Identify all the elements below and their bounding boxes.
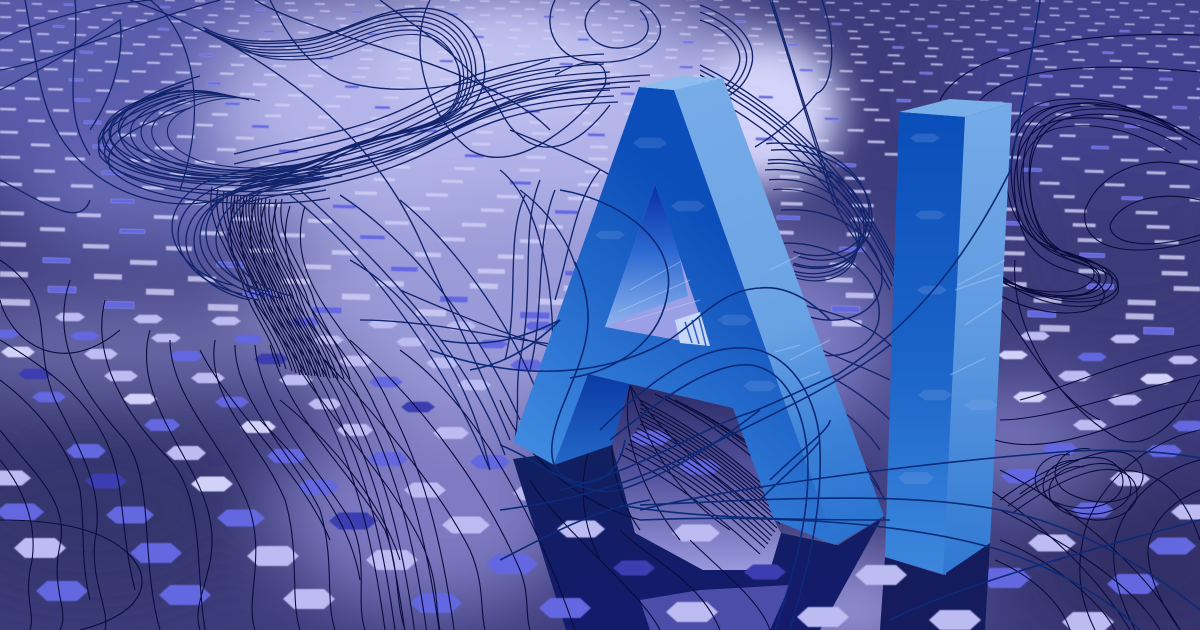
A inner wall [554,374,630,465]
A side face [674,78,884,545]
near hexagon tiles [0,313,1200,630]
letter A [513,76,884,545]
flowing lines in front of the letters [430,0,1200,630]
I side face [943,103,1012,575]
I front face [885,112,965,575]
A surface highlights [770,255,830,380]
letter I [885,99,1012,575]
reflection: letters on the floor [513,445,990,630]
A front face [513,87,835,545]
A triangular opening [605,185,710,346]
flowing lines: upper tangle [0,0,753,470]
I surface highlights [950,260,1005,375]
far hexagon rows (light) [0,0,1200,332]
A top edge [639,76,723,90]
floor seen through the gap under the A [612,384,781,570]
flowing lines: right spiral [940,34,1200,630]
flowing lines: dense vertical bundle [211,187,350,379]
flowing lines: dense fan under the A [500,385,825,630]
I top face [899,99,1012,117]
flowing lines: loops between the letters [697,0,895,520]
flowing lines: black field at the lower left [0,200,575,630]
far hexagon rows (blue) [0,3,1200,332]
tiles on the reflection [539,430,981,630]
